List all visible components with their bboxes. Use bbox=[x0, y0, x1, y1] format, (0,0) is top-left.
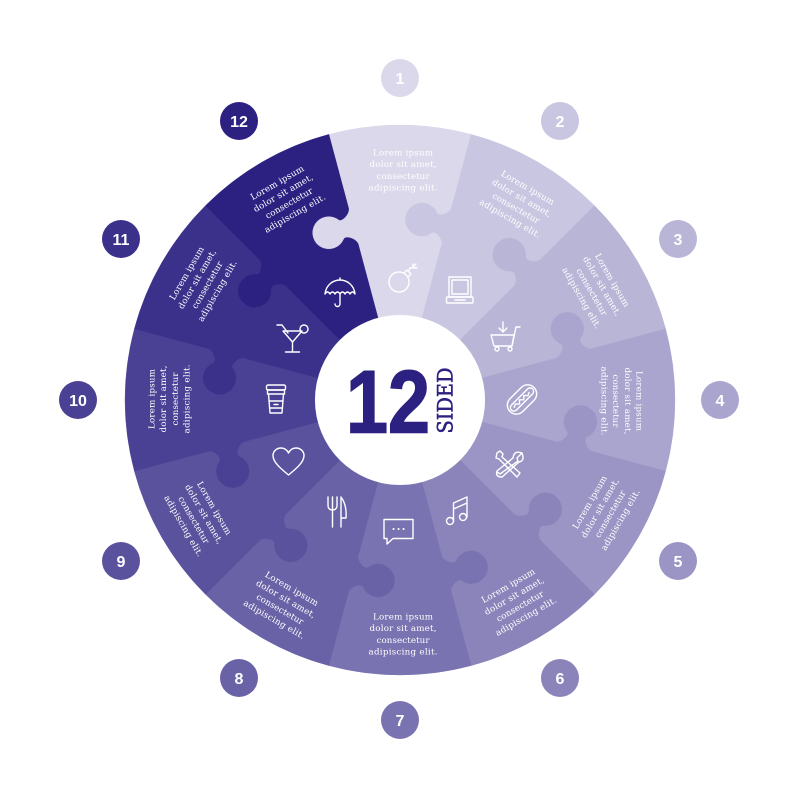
number badge 10: 10 bbox=[69, 393, 87, 410]
text: segment 11: Lorem ipsum bbox=[168, 245, 207, 302]
number badge 2 bbox=[541, 102, 579, 140]
text: segment 6: Lorem ipsum bbox=[480, 567, 537, 606]
panel: segment 1 bbox=[312, 125, 471, 318]
text: segment 11: adipiscing elit. bbox=[197, 259, 240, 324]
text: segment 4: adipiscing elit. bbox=[598, 366, 608, 436]
text: segment 11: dolor sit amet, bbox=[177, 248, 219, 311]
number badge 8: 8 bbox=[235, 671, 244, 688]
text: segment 1: Lorem ipsum bbox=[373, 148, 433, 158]
icon: shopping cart bbox=[491, 322, 520, 351]
number badge 1: 1 bbox=[396, 71, 405, 88]
icon: umbrella bbox=[325, 278, 355, 306]
icon: coffee cup bbox=[266, 385, 286, 413]
text: segment 12: adipiscing elit. bbox=[263, 193, 328, 236]
center title bbox=[315, 315, 485, 485]
text: segment 6: dolor sit amet, bbox=[483, 576, 546, 618]
number badge 10 bbox=[59, 381, 97, 419]
text: segment 3: consectetur bbox=[573, 267, 609, 319]
text: segment 3 bbox=[559, 248, 633, 331]
number badge 1 bbox=[381, 59, 419, 97]
text: segment 1 bbox=[368, 148, 438, 194]
text: segment 11 bbox=[166, 241, 240, 324]
text: segment 2: consectetur bbox=[490, 191, 542, 227]
text: segment 10: consectetur bbox=[171, 372, 181, 426]
number badge 7 bbox=[381, 701, 419, 739]
icon: fork and knife bbox=[328, 497, 346, 527]
number badge 3 bbox=[659, 220, 697, 258]
text: segment 12 bbox=[245, 162, 328, 236]
text: segment 8: Lorem ipsum bbox=[263, 570, 320, 609]
panel: segment 9 bbox=[126, 379, 373, 613]
panel: segment 4 bbox=[482, 312, 675, 471]
number badge 6: 6 bbox=[556, 671, 565, 688]
text: segment 8: adipiscing elit. bbox=[241, 599, 306, 642]
number badge 5: 5 bbox=[674, 554, 683, 571]
text: segment 8 bbox=[241, 568, 324, 642]
panel: segment 8 bbox=[201, 436, 435, 682]
text: segment 12: consectetur bbox=[264, 186, 316, 222]
text: segment 9 bbox=[161, 476, 235, 559]
number badge 12: 12 bbox=[230, 114, 248, 131]
icon: wrench and screwdriver bbox=[496, 451, 523, 477]
text: segment 7: Lorem ipsum bbox=[373, 612, 433, 622]
number badge 7: 7 bbox=[396, 713, 405, 730]
text: segment 3: dolor sit amet, bbox=[580, 255, 622, 318]
text: segment 5 bbox=[569, 470, 643, 553]
text: segment 9: dolor sit amet, bbox=[182, 483, 224, 546]
number badge 3: 3 bbox=[674, 232, 683, 249]
text: segment 7: consectetur bbox=[376, 636, 430, 646]
panel: segment 10 bbox=[125, 329, 318, 488]
text: segment 4: consectetur bbox=[610, 374, 620, 428]
icon: hot dog bbox=[504, 381, 540, 418]
text: segment 9: consectetur bbox=[175, 495, 211, 547]
panel: segment 12 bbox=[187, 126, 421, 373]
text: segment 12: dolor sit amet, bbox=[252, 173, 315, 215]
icon: heart bbox=[273, 448, 304, 475]
text: segment 10 bbox=[147, 364, 193, 434]
icon: music notes bbox=[446, 497, 467, 524]
center title: SIDED bbox=[434, 368, 458, 434]
text: segment 9: Lorem ipsum bbox=[194, 480, 233, 537]
icon: bomb bbox=[389, 264, 417, 292]
panel: segment 7 bbox=[329, 482, 488, 675]
icon: cocktail glass bbox=[277, 325, 308, 352]
number badge 9 bbox=[102, 542, 140, 580]
icon: speech bubble bbox=[384, 520, 413, 544]
number badge 2: 2 bbox=[556, 114, 565, 131]
text: segment 12: Lorem ipsum bbox=[249, 164, 306, 203]
text: segment 7: dolor sit amet, bbox=[370, 624, 436, 634]
panel: segment 11 bbox=[118, 201, 364, 435]
text: segment 4 bbox=[598, 366, 644, 436]
icon: laptop bbox=[446, 277, 473, 303]
number badge 4 bbox=[701, 381, 739, 419]
text: segment 9: adipiscing elit. bbox=[161, 494, 204, 559]
text: segment 4: dolor sit amet, bbox=[622, 368, 632, 434]
number badge 4: 4 bbox=[716, 393, 725, 410]
text: segment 5: Lorem ipsum bbox=[571, 474, 610, 531]
text: segment 2: dolor sit amet, bbox=[490, 178, 553, 220]
number badge 11 bbox=[102, 220, 140, 258]
text: segment 11: consectetur bbox=[190, 259, 226, 311]
number badge 6 bbox=[541, 659, 579, 697]
text: segment 10: dolor sit amet, bbox=[159, 366, 169, 432]
text: segment 6 bbox=[476, 565, 559, 639]
text: segment 2: Lorem ipsum bbox=[499, 169, 556, 208]
text: segment 1: consectetur bbox=[376, 172, 430, 182]
text: segment 1: dolor sit amet, bbox=[370, 160, 436, 170]
text: segment 3: Lorem ipsum bbox=[592, 252, 631, 309]
text: segment 7: adipiscing elit. bbox=[368, 648, 438, 658]
text: segment 3: adipiscing elit. bbox=[559, 266, 602, 331]
text: segment 10: adipiscing elit. bbox=[183, 364, 193, 434]
text: segment 6: consectetur bbox=[495, 589, 547, 625]
panel: segment 2 bbox=[365, 118, 599, 364]
text: segment 7 bbox=[368, 612, 438, 658]
text: segment 10: Lorem ipsum bbox=[147, 369, 157, 429]
center title: 12 bbox=[346, 352, 430, 452]
text: segment 2 bbox=[477, 167, 560, 241]
panel: segment 5 bbox=[436, 365, 682, 599]
panel: segment 6 bbox=[379, 427, 613, 674]
text: segment 5: dolor sit amet, bbox=[580, 477, 622, 540]
text: segment 2: adipiscing elit. bbox=[477, 198, 542, 241]
panel: segment 3 bbox=[427, 187, 674, 421]
text: segment 5: adipiscing elit. bbox=[600, 488, 643, 553]
text: segment 6: adipiscing elit. bbox=[494, 596, 559, 639]
text: segment 5: consectetur bbox=[593, 488, 629, 540]
text: segment 4: Lorem ipsum bbox=[634, 371, 644, 431]
number badge 9: 9 bbox=[117, 554, 126, 571]
number badge 12 bbox=[220, 102, 258, 140]
number badge 11: 11 bbox=[113, 232, 130, 249]
number badge 5 bbox=[659, 542, 697, 580]
text: segment 8: dolor sit amet, bbox=[254, 579, 317, 621]
number badge 8 bbox=[220, 659, 258, 697]
text: segment 1: adipiscing elit. bbox=[368, 184, 438, 194]
text: segment 8: consectetur bbox=[254, 592, 306, 628]
